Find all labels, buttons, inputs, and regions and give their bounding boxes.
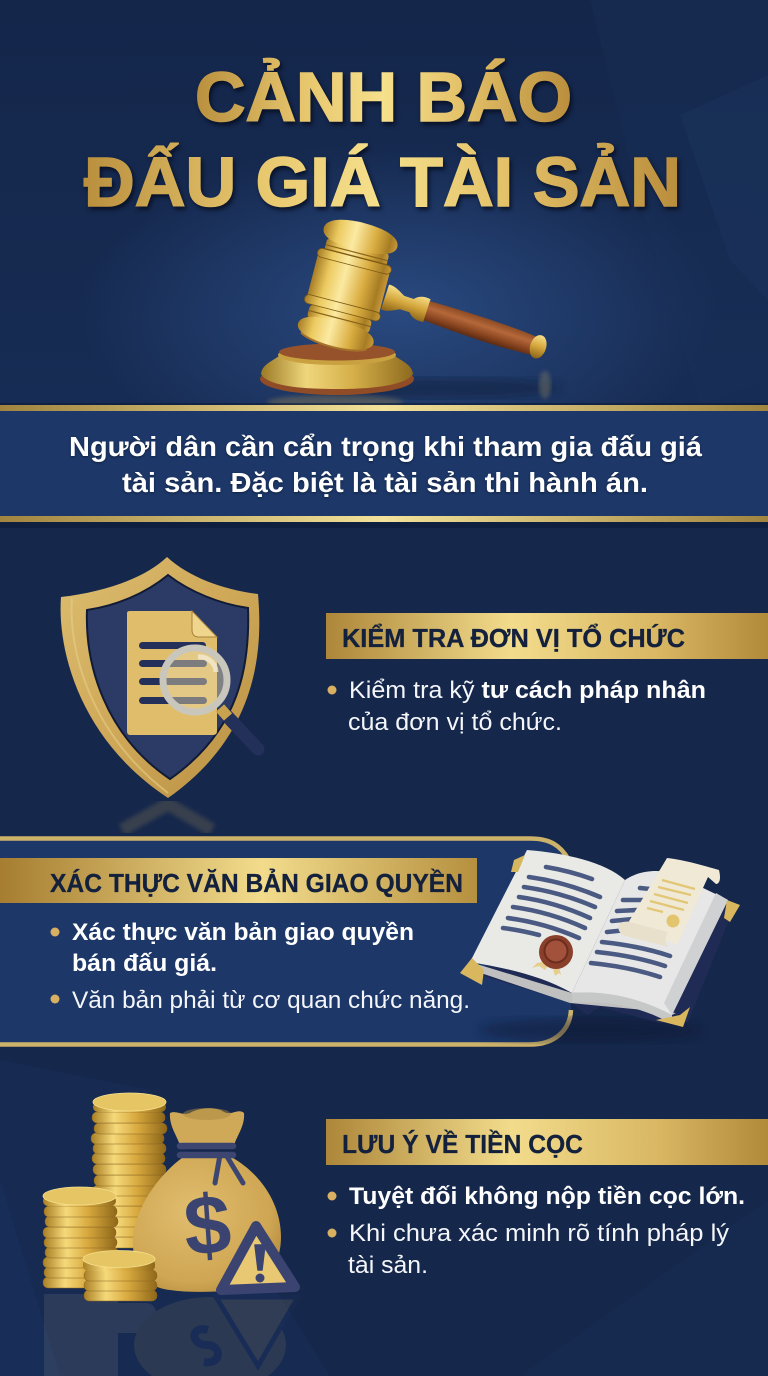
bullet text: tài sản.: [348, 1252, 428, 1279]
panel: section 3: [326, 1119, 768, 1279]
bullet text: bán đấu giá.: [72, 950, 217, 977]
title: [84, 58, 681, 221]
money bag: [133, 1108, 281, 1292]
money bag: $: [181, 1176, 234, 1273]
panel: intro banner: tài sản. Đặc biệt là tài sản thi hành án.: [122, 467, 648, 498]
icon: shield with document and magnifier: [61, 557, 259, 830]
icon: open book with scroll and seal: [460, 850, 740, 1042]
bullet text: Văn bản phải từ cơ quan chức năng.: [72, 987, 470, 1014]
bullet text: Xác thực văn bản giao quyền: [72, 919, 414, 946]
bullet text: [328, 1183, 745, 1279]
bullet text: Kiểm tra kỹ tư cách pháp nhân: [349, 677, 706, 704]
front coin stack: [83, 1250, 157, 1301]
icon: coins, money bag and warning: [43, 1093, 298, 1376]
bullet text: của đơn vị tổ chức.: [348, 709, 562, 736]
bullet text: [328, 677, 706, 736]
heading bar: [326, 1119, 768, 1165]
heading bar: LƯU Ý VỀ TIỀN CỌC: [342, 1129, 583, 1159]
heading bar: XÁC THỰC VĂN BẢN GIAO QUYỀN: [50, 868, 463, 898]
panel: intro banner: [0, 403, 768, 528]
warning triangle: [221, 1226, 295, 1290]
tall coin stack: [91, 1093, 168, 1248]
reflection: [44, 1294, 298, 1376]
title: CẢNH BÁO: [195, 58, 572, 136]
bullet text: Khi chưa xác minh rõ tính pháp lý: [349, 1220, 729, 1247]
bullet text: Tuyệt đối không nộp tiền cọc lớn.: [349, 1183, 745, 1210]
heading bar: KIỂM TRA ĐƠN VỊ TỔ CHỨC: [342, 623, 685, 653]
heading bar: [326, 613, 768, 659]
title: ĐẤU GIÁ TÀI SẢN: [84, 143, 681, 221]
bullet text: [50, 919, 470, 1014]
icon: gavel: [260, 213, 560, 409]
heading bar: [0, 858, 477, 903]
panel: intro banner: Người dân cần cẩn trọng khi tham gia đấu giá: [69, 431, 702, 462]
panel: section 2: [0, 838, 571, 1044]
panel: section 1: [326, 613, 768, 736]
left coin stack: [43, 1187, 118, 1288]
